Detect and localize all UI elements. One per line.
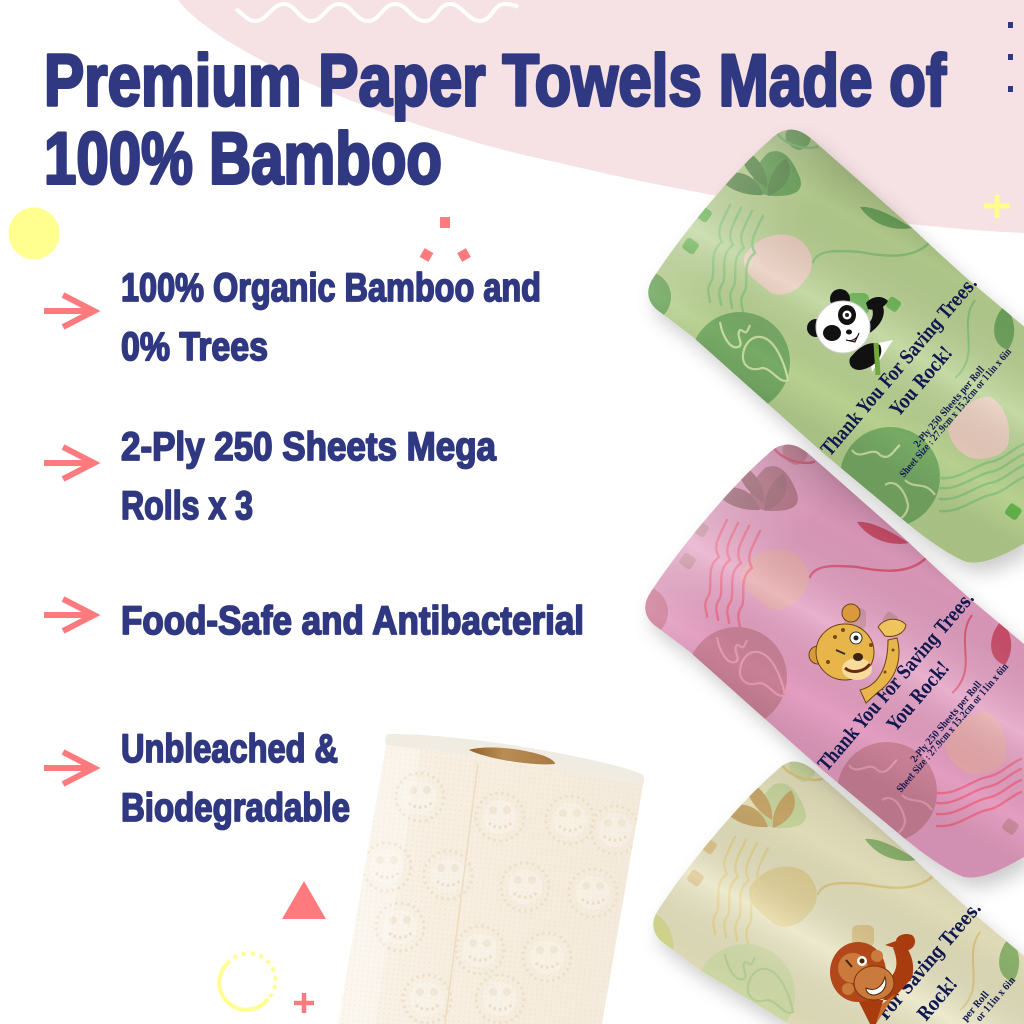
benefit 2 text: 2-Ply 250 Sheets Mega: [121, 425, 497, 469]
benefit 4 text: Biodegradable: [121, 786, 350, 830]
benefit 2 text: Rolls x 3: [121, 484, 253, 528]
benefit 2: [44, 425, 497, 528]
benefit 2 text: [121, 425, 497, 528]
benefit 4 text: [121, 727, 350, 830]
decoration: coral plus: [294, 993, 314, 1013]
cream label text: per Roll: [960, 989, 992, 1024]
pink background swoosh: [178, 0, 1024, 233]
decoration: white wave: [236, 4, 518, 21]
decoration: yellow dashed ring: [219, 953, 276, 1010]
arrow 1: [44, 295, 94, 327]
decoration: navy dots: [1008, 22, 1013, 92]
green wrapper: [619, 120, 1024, 570]
embossed pattern: [338, 745, 643, 1024]
benefit 1 text: [121, 266, 541, 369]
green label text: 2-Ply 250 Sheets per Roll: [912, 364, 987, 450]
roll body: [338, 745, 643, 1024]
benefit 1 text: 0% Trees: [121, 325, 268, 369]
green label text: You Rock!: [886, 342, 957, 421]
decoration: coral squares: [420, 217, 471, 262]
pink label text: 2-Ply 250 Sheets per Roll: [909, 679, 984, 765]
pink label text: Thank You For Saving Trees.: [814, 588, 979, 775]
benefit 1 text: 100% Organic Bamboo and: [121, 266, 541, 310]
benefit 4 text: Unbleached &: [121, 727, 338, 771]
title: [44, 40, 947, 200]
pink wrapper: [616, 435, 1024, 885]
title: 100% Bamboo: [44, 118, 442, 200]
benefit 3: [44, 599, 584, 643]
unbleached bamboo roll: [338, 734, 644, 1024]
cream roll with orangutan: [640, 755, 1024, 1024]
decoration: coral triangle: [282, 881, 326, 919]
cardboard core: [469, 748, 555, 764]
cream label text: For Saving Trees.: [873, 897, 986, 1024]
cream wrapper: [640, 755, 1024, 1024]
benefit 3 text: Food-Safe and Antibacterial: [121, 599, 584, 643]
mascot: panda: [807, 289, 893, 375]
mascot: leopard: [809, 604, 906, 703]
roll top surface: [385, 734, 644, 785]
green label text: [817, 273, 1014, 480]
arrow 3: [44, 599, 94, 631]
pink label text: [814, 588, 1011, 795]
mascot: orangutan: [830, 934, 915, 1024]
benefit 1: [44, 266, 541, 369]
arrow 2: [44, 447, 94, 479]
pink roll with leopard: [616, 435, 1024, 885]
decoration: yellow circle: [8, 208, 60, 260]
cream label text: Rock!: [913, 973, 962, 1024]
decoration: yellow plus: [984, 195, 1010, 218]
green roll with panda: [619, 120, 1024, 570]
arrow 4: [44, 752, 94, 784]
pink label text: You Rock!: [883, 657, 954, 736]
benefit 4: [44, 727, 350, 830]
